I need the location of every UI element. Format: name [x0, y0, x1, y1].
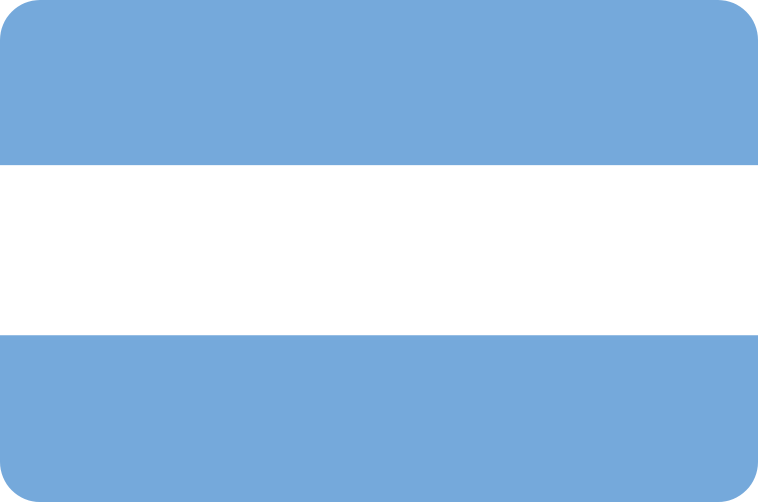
top blue band	[0, 0, 758, 165]
bottom blue band	[0, 335, 758, 502]
middle white band	[0, 165, 758, 335]
